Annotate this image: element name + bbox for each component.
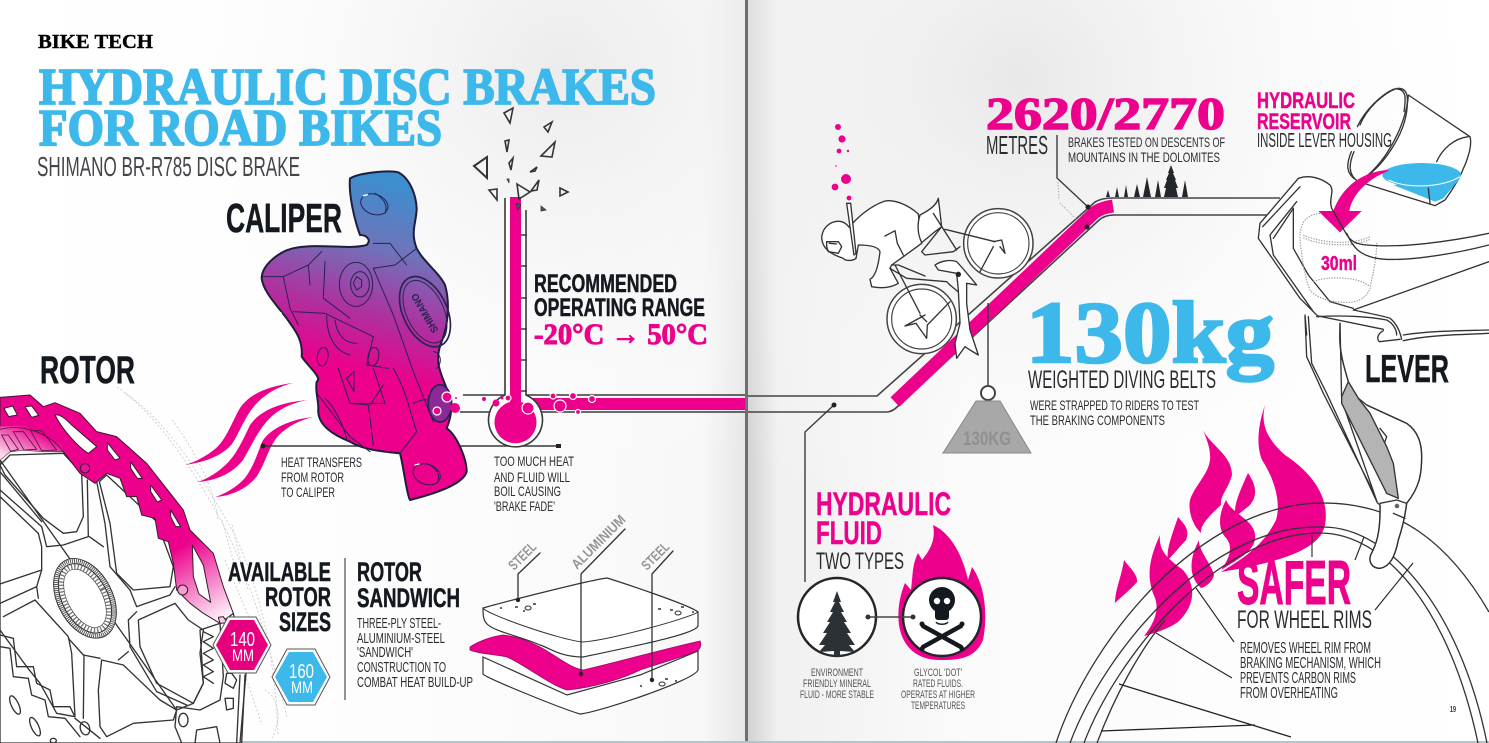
callout leader: heat transfers [260,444,561,448]
badge: 140 mm [213,617,271,673]
130kg number: 130kg [1026,285,1274,382]
sandwich diagram: STEEL [638,538,673,573]
glycol fluid caption: GLYCOL 'DOT' [914,667,962,679]
safer sub heading: FOR WHEEL RIMS [1237,606,1372,634]
section label: BIKE TECH [38,31,153,53]
glycol fluid caption: TEMPERATURES [911,700,965,712]
boiling bubbles [433,392,596,415]
rotor sandwich text: 'SANDWICH' [357,644,413,661]
badge: 140 mm: 140 [230,629,255,651]
weighted belts heading: WEIGHTED DIVING BELTS [1028,366,1216,394]
rotor disc outline [0,460,246,743]
weight label: 130KG [963,429,1011,450]
badge: 140 mm: MM [232,646,254,665]
safer leaders [1156,535,1413,678]
thermometer [488,197,542,447]
rotor sandwich text: ALUMINIUM-STEEL [357,630,445,647]
saddle and frame [918,198,942,243]
mineral fluid caption: ENVIRONMENT [811,667,863,679]
rider [822,201,922,288]
layer labels: STEEL [505,538,540,573]
rotor hub [41,548,129,649]
bottom steel layer [483,651,698,714]
cyclist illustration [822,198,1033,358]
lever hood illustration [1258,88,1489,335]
icon: mineral fluid tree [798,578,876,657]
brake fade caption: 'BRAKE FADE' [494,498,555,514]
altitude text: BRAKES TESTED ON DESCENTS OF [1068,134,1225,150]
tree line [1106,165,1188,197]
available rotor sizes heading: SIZES [279,607,331,637]
rotor sandwich heading [357,557,460,613]
rotor sandwich text: COMBAT HEAT BUILD-UP [357,674,473,691]
lever grip [1342,382,1398,498]
available rotor sizes heading [228,557,331,637]
bicycle wheel [1056,503,1489,743]
icon: skull and crossbones [903,578,981,656]
heat transfer caption: HEAT TRANSFERS [281,454,362,470]
brake fade caption: AND FLUID WILL [494,469,570,485]
hood lines over arrow [1298,177,1489,259]
rear fork [905,302,950,338]
top steel layer [483,578,698,657]
page number: 19 [1450,705,1456,714]
safer text [1240,640,1381,702]
sandwich diagram [470,511,701,714]
weight [943,303,1031,453]
altitude number: 2620/2770 [986,89,1225,139]
available rotor sizes heading: AVAILABLE [228,557,331,587]
mineral fluid caption: FRIENDLY MINERAL [803,678,871,690]
glycol fluid caption [901,667,975,712]
operating range value: -20°C → 50°C [534,318,708,351]
rotor band slots [4,406,227,623]
reservoir heading [1257,88,1355,134]
30ml label: 30ml [1321,253,1357,275]
glycol fluid caption: OPERATES AT HIGHER [901,689,975,701]
reservoir heading: RESERVOIR [1257,109,1351,134]
rotor sandwich text: THREE-PLY STEEL- [357,615,441,632]
rotor sandwich text [357,615,473,691]
rider leg [935,261,978,358]
badge: 160 mm: MM [291,678,313,697]
altitude text: MOUNTAINS IN THE DOLOMITES [1068,149,1220,165]
fluid pipe left page [460,395,745,412]
title [39,59,656,157]
weighted belts text: WERE STRAPPED TO RIDERS TO TEST [1030,397,1199,413]
rotor label: ROTOR [40,349,135,392]
rotor sandwich text: CONSTRUCTION TO [357,659,446,676]
icon: flame behind glycol [898,525,985,660]
reservoir sub heading: INSIDE LEVER HOUSING [1257,130,1392,152]
front wheel [964,209,1033,278]
safer text: BRAKING MECHANISM, WHICH [1240,655,1381,672]
safer text: FROM OVERHEATING [1240,685,1338,702]
heat transfer caption: FROM ROTOR [281,469,344,485]
rotor ghost outline [117,387,287,738]
cup [1358,95,1471,206]
lever body [1340,323,1422,568]
hydraulic fluid heading [816,486,951,575]
pour arrow [1318,170,1388,232]
heat waves [185,383,313,497]
caliper logo: SHIMANO [410,291,441,335]
bubbles above rider [832,124,851,200]
weighted belts text: THE BRAKING COMPONENTS [1030,412,1165,428]
badge: 160 mm [272,649,330,705]
brake lever illustration [1305,310,1489,568]
brake fade caption: TOO MUCH HEAT [494,453,574,469]
caliper label: CALIPER [226,195,342,241]
metres label: METRES [986,130,1048,160]
subtitle: SHIMANO BR-R785 DISC BRAKE [37,151,300,182]
rotor heated band [0,395,233,623]
rotor illustration [0,387,287,743]
rotor sandwich heading: ROTOR [357,557,422,587]
heat transfer caption: TO CALIPER [281,484,335,500]
badge: 160 mm: 160 [289,661,314,683]
leader: hydraulic fluid [805,402,836,582]
glycol fluid caption: RATED FLUIDS. [913,678,963,690]
brake fade caption: BOIL CAUSING [494,483,561,499]
rotor sandwich heading: SANDWICH [357,583,460,613]
mineral fluid caption: FLUID - MORE STABLE [800,689,874,701]
caliper details [262,190,461,489]
mineral fluid caption [800,667,874,701]
sandwich diagram: ALUMINIUM [568,511,629,572]
hood body [1258,177,1489,317]
safer heading: SAFER [1237,549,1351,618]
wheel flames [1115,405,1326,636]
title: FOR ROAD BIKES [39,100,442,157]
operating range heading: RECOMMENDED [534,270,677,298]
operating range heading [534,270,705,322]
caliper illustration [262,171,467,500]
heat transfer caption [281,454,362,500]
hydraulic fluid heading: HYDRAULIC [816,486,951,522]
leader lines [518,529,673,680]
safer text: REMOVES WHEEL RIM FROM [1240,640,1371,657]
fluid pipe right page [748,198,1280,412]
safer text: PREVENTS CARBON RIMS [1240,670,1356,687]
reservoir heading: HYDRAULIC [1257,88,1355,113]
rotor band left fade [0,423,63,460]
connector between fluid types [866,614,916,620]
shattered glass shards [474,108,568,211]
weighted belts text [1030,397,1199,428]
rear wheel [887,284,956,354]
altitude text [1068,134,1225,165]
snorkel [847,203,856,255]
title: HYDRAULIC DISC BRAKES [39,59,656,116]
hydraulic fluid heading: FLUID [816,515,882,551]
rotor pockets [0,453,245,743]
fluid [1393,178,1460,202]
hydraulic fluid heading: TWO TYPES [816,548,904,575]
aluminium layer [470,635,701,690]
reservoir dotted outline [1300,213,1377,302]
operating range heading: OPERATING RANGE [534,294,705,322]
caliper body [262,171,467,500]
brake fade caption [494,453,574,514]
available rotor sizes heading: ROTOR [265,582,331,612]
altitude leader [1057,135,1090,230]
